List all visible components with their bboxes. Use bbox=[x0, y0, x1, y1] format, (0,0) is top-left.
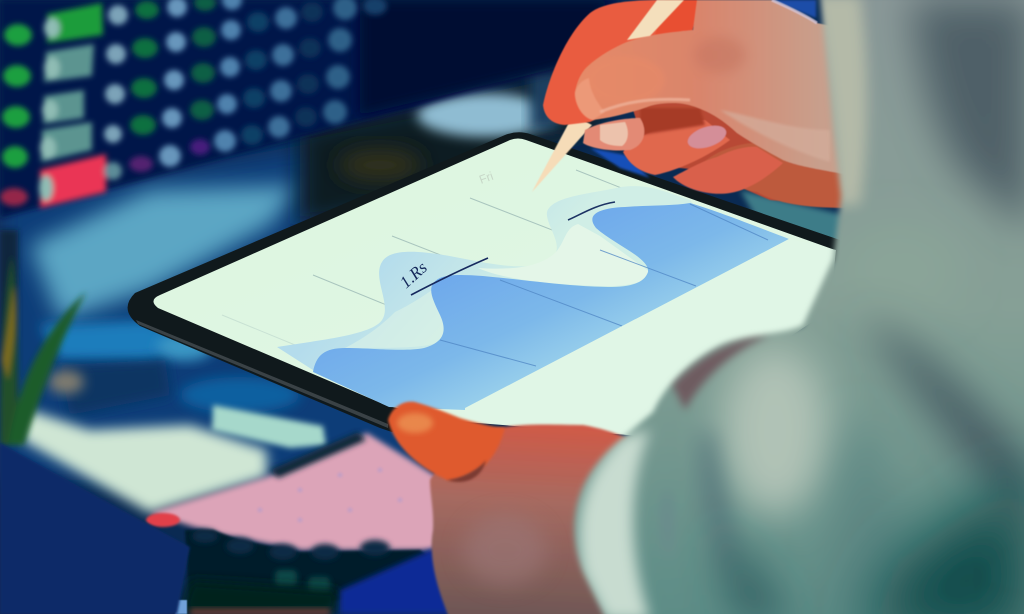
knuckle behind stylus bbox=[655, 0, 700, 36]
middle finger nail bbox=[600, 122, 628, 146]
sleeve of shirt bbox=[560, 0, 1024, 614]
knuckle tone bbox=[463, 515, 547, 585]
middle finger bbox=[583, 118, 644, 151]
blue reflection between fingers bbox=[590, 148, 650, 178]
keyboard on desk bbox=[146, 432, 460, 614]
tablet bbox=[128, 132, 840, 436]
sleeve folds: cuff bbox=[699, 430, 735, 580]
sleeve mid highlight bbox=[840, 225, 960, 315]
chart grid lines bbox=[222, 170, 768, 366]
monitor data grid bbox=[0, 0, 387, 208]
sleeve base bbox=[560, 0, 1024, 614]
sleeve fold: diagonal bbox=[862, 315, 1024, 530]
little finger bbox=[673, 147, 783, 194]
handwritten underline: first peak bbox=[411, 258, 488, 295]
white lower screen panel bbox=[465, 239, 836, 436]
dark notebook bbox=[0, 443, 190, 614]
sleeve pale top strip bbox=[815, 0, 867, 205]
teal surface behind tablet bbox=[740, 190, 845, 262]
blue area chart bbox=[313, 203, 789, 410]
stylus pencil: upper part bbox=[627, 0, 684, 40]
thumb highlight and shading bbox=[585, 56, 665, 104]
thumb and back of hand bbox=[575, 0, 850, 175]
white wave lobe: left bbox=[345, 290, 445, 348]
white wave lobe: right bbox=[478, 224, 650, 286]
label: day: Fri bbox=[477, 169, 495, 187]
pale wave area bbox=[277, 186, 720, 400]
stylus pencil: lower part bbox=[532, 115, 592, 192]
hand backing under fingers bbox=[630, 100, 850, 208]
chart grid lines over blue bbox=[440, 204, 768, 366]
dark pen bbox=[270, 432, 366, 478]
thumb shadow bbox=[447, 460, 486, 482]
thumb highlight bbox=[397, 413, 433, 433]
paper on desk bbox=[20, 407, 267, 513]
sleeve left pale area bbox=[720, 345, 830, 515]
sleeve lower right shadow bbox=[860, 470, 1024, 614]
pale object on desk bbox=[212, 405, 326, 448]
ring finger bbox=[623, 120, 730, 175]
tablet screen bbox=[153, 138, 835, 436]
handwritten underline: second peak bbox=[568, 202, 615, 220]
index finger bbox=[543, 0, 700, 125]
lower hand holding the tablet bbox=[388, 402, 660, 614]
sleeve left edge highlight bbox=[579, 430, 650, 614]
background: blurred desk colours bbox=[0, 70, 600, 480]
handwritten note: 1.Rs bbox=[396, 258, 431, 292]
blue object behind hand bbox=[770, 0, 816, 18]
upper hand holding the stylus bbox=[543, 0, 850, 208]
finger shadow bbox=[640, 108, 705, 135]
potted plant bbox=[0, 230, 86, 445]
thumb bbox=[388, 402, 505, 480]
sleeve upper dark area bbox=[910, 0, 1024, 230]
back of hand bbox=[430, 424, 660, 614]
palm base bbox=[700, 143, 850, 208]
computer monitor with trading data bbox=[0, 0, 620, 218]
ring finger nail bbox=[685, 121, 729, 153]
sleeve brown shadow bbox=[672, 335, 770, 410]
tablet body bbox=[128, 132, 840, 432]
tablet lower bezel highlight bbox=[136, 320, 388, 428]
